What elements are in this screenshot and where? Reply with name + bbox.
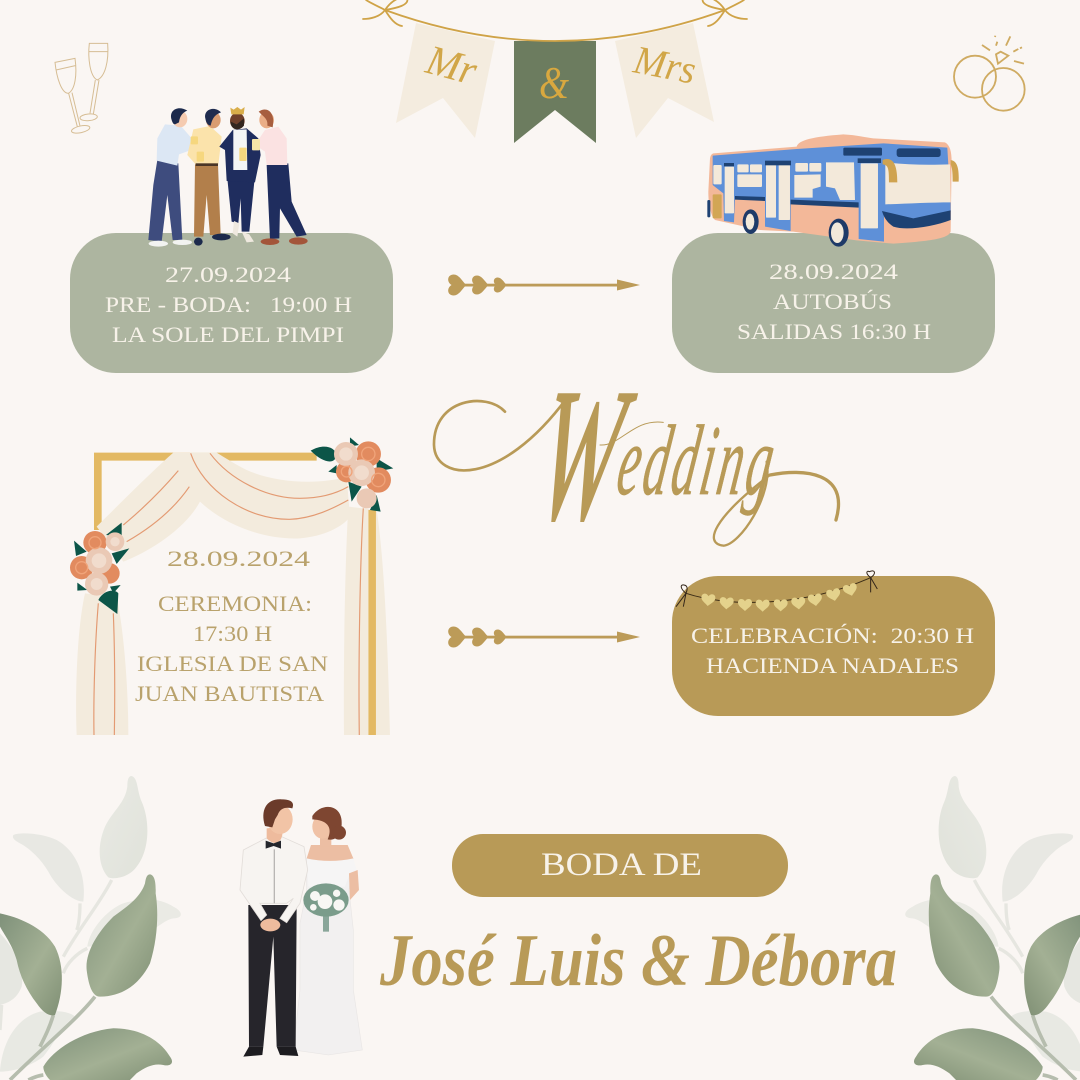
friend 2 [187, 109, 231, 246]
text: autobus details: SALIDAS 16:30 H [737, 319, 931, 344]
text: pre-boda details: 27.09.2024 [165, 262, 291, 287]
decorative leaves: bottom left [0, 776, 181, 1080]
text: autobus details: 28.09.2024 [769, 259, 898, 284]
panel: autobus [672, 233, 995, 373]
groom [240, 799, 308, 1057]
arrow: ceremony to celebration [448, 626, 640, 648]
illustration: bride and groom [240, 799, 362, 1057]
decorative leaves: bottom right [905, 776, 1080, 1080]
illustration: wedding arch [70, 437, 393, 735]
heading: Wedding script [434, 350, 839, 559]
heading: Wedding script: edding [611, 407, 785, 517]
banner flag: & [514, 41, 596, 143]
text: autobus details: AUTOBÚS [773, 289, 892, 314]
heading: couple names: José Luis & Débora [379, 920, 897, 1002]
friend 1 [148, 108, 196, 247]
label pill: Boda de: BODA DE [541, 847, 702, 883]
banner string and bows [363, 0, 747, 41]
bus mirrors [883, 159, 959, 182]
illustration: bus [707, 134, 959, 247]
text: pre-boda details: LA SOLE DEL PIMPI [112, 322, 344, 347]
text: ceremony details: IGLESIA DE SAN [137, 651, 328, 676]
arch frame [94, 453, 376, 735]
text: ceremony details: 17:30 H [193, 621, 272, 646]
text: ceremony details: 28.09.2024 [167, 546, 310, 571]
text: pre-boda details: PRE - BODA: 19:00 H [105, 292, 352, 317]
text: pre-boda details [105, 262, 352, 347]
arch drapery [76, 453, 390, 735]
text: autobus details [737, 259, 931, 344]
bus dark trim [707, 148, 951, 228]
icon: wedding rings with diamond [954, 36, 1025, 111]
banner flag: &: & [539, 57, 569, 108]
panel: celebration [672, 571, 995, 716]
banner flag: Mrs [615, 23, 714, 138]
arch orange folds [94, 453, 363, 735]
flowers: left [70, 523, 129, 614]
bus body [708, 134, 952, 244]
bus blue upper body [713, 143, 951, 242]
text: celebration details [691, 623, 974, 678]
text: ceremony details: CEREMONIA: [158, 591, 312, 616]
bus windows [713, 162, 951, 228]
banner flag: Mr: Mr [420, 37, 482, 95]
garland of hearts [676, 571, 877, 612]
arrow: pre-boda to autobus [448, 274, 640, 296]
bouquet [303, 883, 349, 932]
bunting banner: Mr & Mrs [363, 0, 747, 143]
icon: champagne glasses [55, 43, 108, 135]
bride [293, 807, 362, 1055]
banner flag: Mrs: Mrs [629, 36, 700, 93]
illustration: four friends toasting [148, 107, 308, 247]
banner flag: Mr [396, 23, 495, 138]
text: ceremony details [135, 546, 328, 706]
friend 3 with crown [219, 107, 261, 242]
bus wheels [743, 209, 849, 247]
label pill: Boda de [452, 834, 788, 897]
heading: Wedding script: W [525, 350, 644, 559]
flowers: top right [311, 437, 393, 512]
text: celebration details: CELEBRACIÓN: 20:30 H [691, 623, 974, 648]
text: celebration details: HACIENDA NADALES [706, 653, 959, 678]
bus grille [713, 194, 722, 218]
Wedding flourishes [434, 398, 839, 546]
panel: pre-boda [70, 233, 393, 373]
text: ceremony details: JUAN BAUTISTA [135, 681, 324, 706]
friend 4 [191, 110, 308, 245]
